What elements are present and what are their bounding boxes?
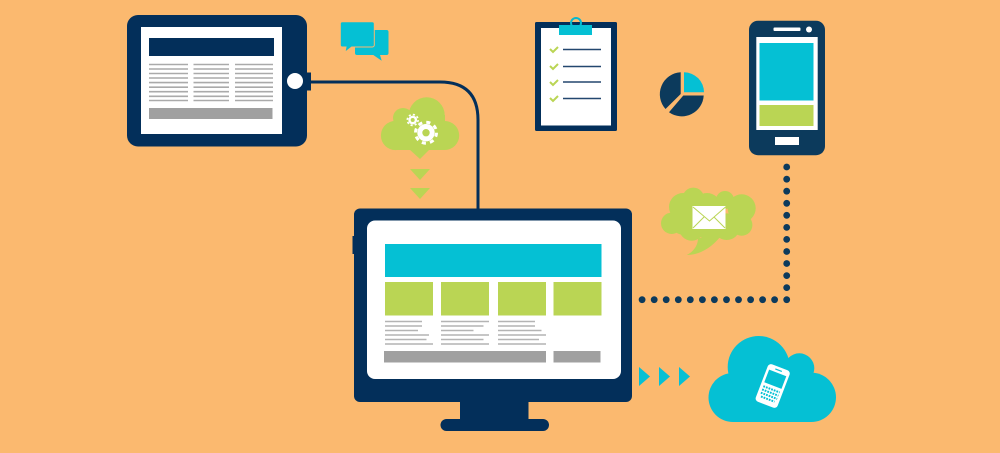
tablet [127, 15, 307, 146]
dotted connector: phone to monitor [639, 164, 790, 303]
icon: cloud with gears [381, 97, 459, 159]
desktop monitor [352, 208, 632, 431]
icon: mail speech cloud [661, 188, 756, 255]
icon: chat bubbles [340, 22, 388, 61]
smartphone [749, 21, 825, 155]
arrows: downward green triangles [410, 169, 430, 199]
arrows: cyan triangles [639, 367, 690, 386]
clipboard with checklist [535, 18, 617, 131]
icon: cloud with smartphone [708, 336, 836, 422]
cable: tablet to monitor [306, 72, 478, 210]
pie chart [660, 72, 704, 116]
